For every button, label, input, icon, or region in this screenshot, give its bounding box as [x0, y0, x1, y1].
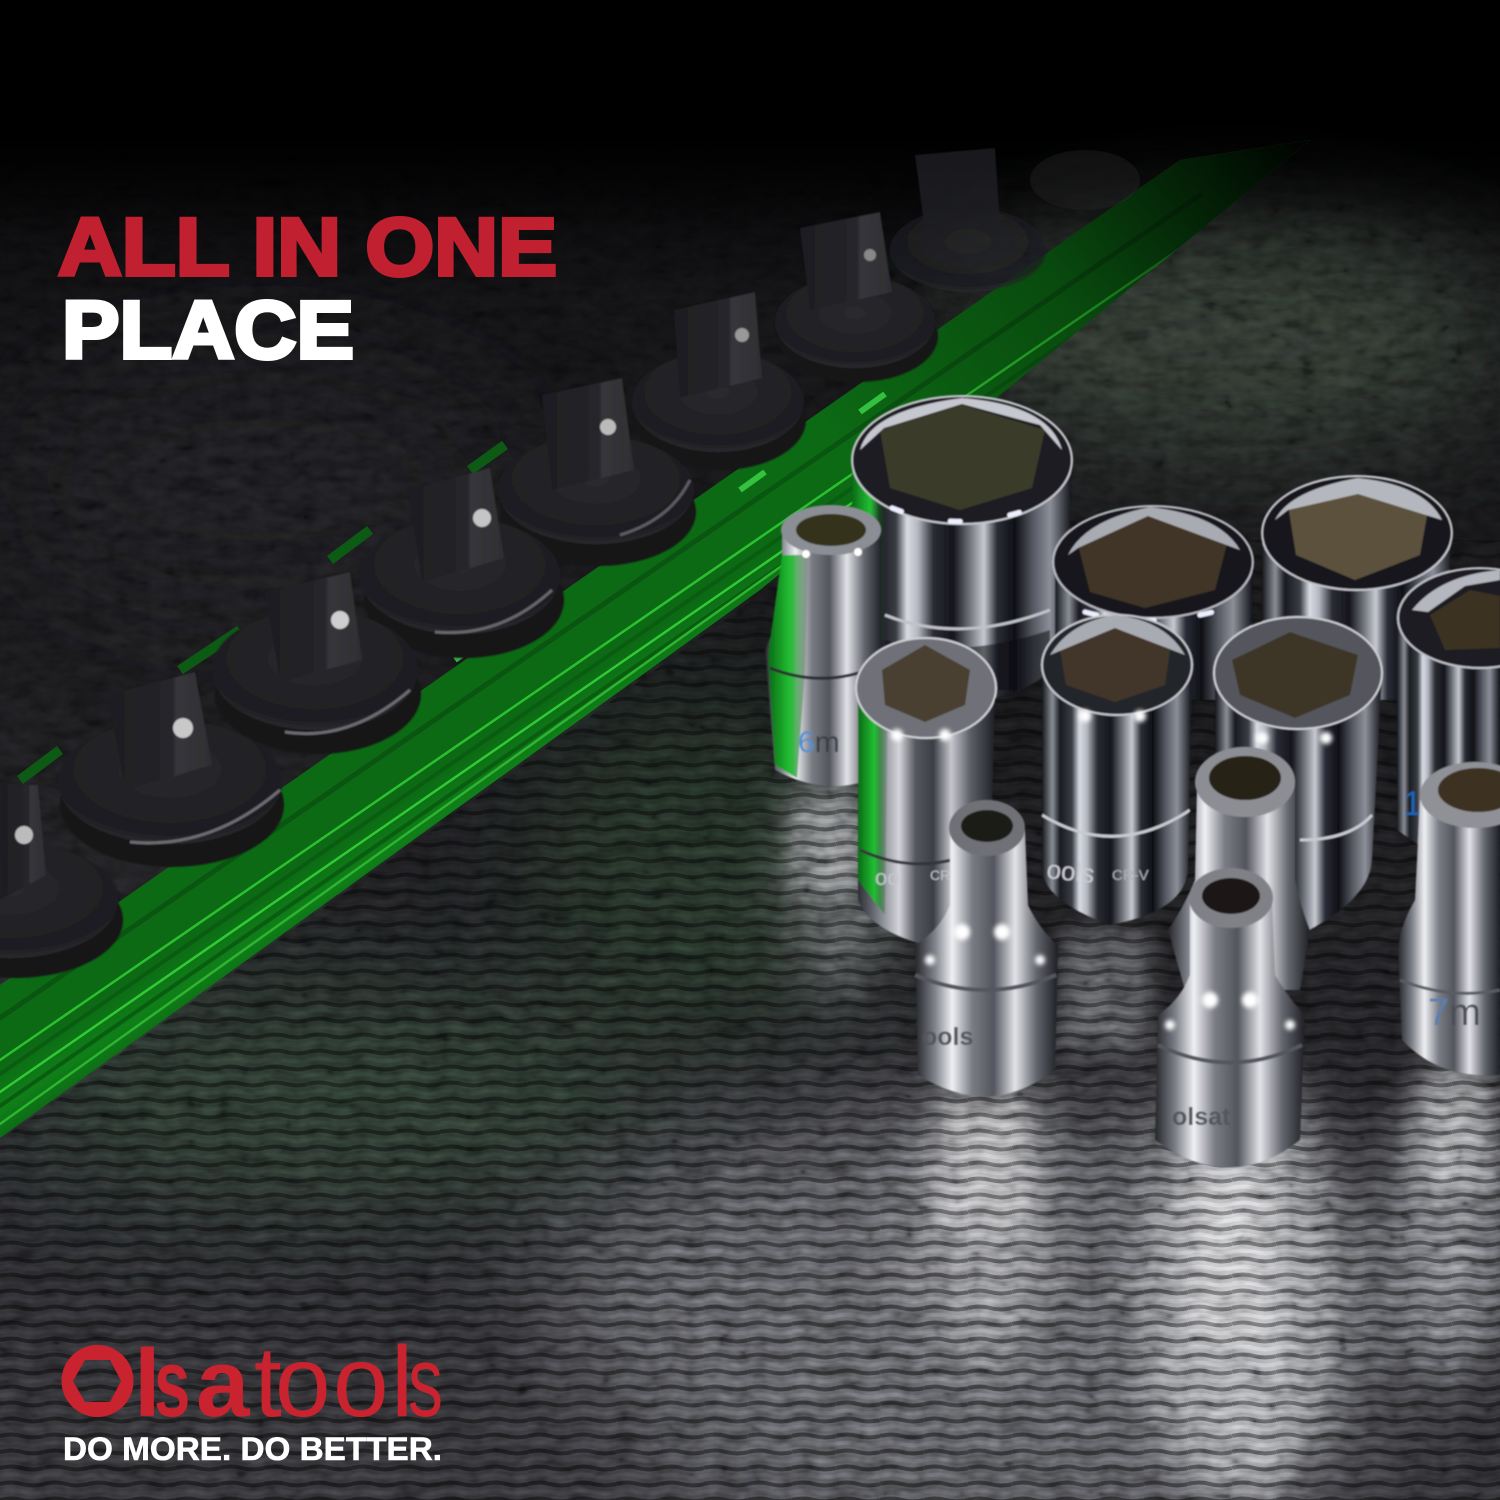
- socket: front small left: [915, 800, 1058, 1096]
- socket: front right tall: [1214, 617, 1382, 935]
- logo: Olsatools: [62, 1326, 443, 1438]
- socket: large rear: [852, 396, 1072, 705]
- adapter 7: [775, 212, 938, 382]
- logo wordmark bold: l: [134, 1330, 161, 1437]
- socket: right edge upper: [1397, 568, 1500, 860]
- group of chrome sockets: [765, 396, 1500, 1168]
- socket: front centre tall: CR-V: [1112, 867, 1149, 884]
- adapter 1 (cut by left edge): [0, 785, 123, 978]
- adapter 5: [498, 378, 696, 566]
- logo icon: hexagon O: [62, 1345, 134, 1417]
- row of black socket adapters on the rail: [0, 148, 1140, 978]
- socket brand marking: ools: [1045, 854, 1096, 889]
- socket: front small right: olsat: [1172, 1103, 1231, 1131]
- adapter 6: [632, 292, 806, 470]
- title line 1: ALL IN ONE: [58, 202, 557, 293]
- socket size marking: 6m: [798, 726, 840, 759]
- socket: right edge lower 7mm: 7m: [1428, 992, 1481, 1034]
- title: ALL IN ONE PLACE: [58, 202, 557, 376]
- socket: front small left: ools: [922, 1023, 973, 1051]
- adapter 8 (faded): [890, 148, 1046, 292]
- socket: rear middle: [1053, 506, 1253, 700]
- socket: small 6mm: [765, 505, 882, 786]
- adapter 3: [212, 572, 421, 754]
- logo: Olsatools: s: [408, 1327, 443, 1438]
- logo wordmark light: tool: [254, 1326, 413, 1438]
- adapter 4: [360, 468, 564, 658]
- socket: front small right: [1155, 868, 1305, 1168]
- reflections under sockets: [790, 790, 1490, 1345]
- socket: small middle: [1168, 747, 1310, 990]
- socket: rear right: [1262, 476, 1452, 700]
- socket: front left tall: CR: [930, 867, 950, 883]
- glints on the rail's upper edge: [20, 445, 505, 780]
- tagline: DO MORE. DO BETTER.: [63, 1431, 442, 1467]
- socket: front left tall: [856, 638, 996, 945]
- socket: front centre tall: [1042, 615, 1192, 925]
- socket: front left tall: oo: [875, 865, 899, 890]
- title line 2: PLACE: [62, 285, 354, 376]
- adapter 9 (faded, far end): [1030, 150, 1140, 210]
- socket: right edge lower 7mm: [1398, 762, 1500, 1076]
- logo: Olsatools: s: [154, 1331, 190, 1437]
- green socket rail: [0, 140, 1310, 1138]
- adapter 2: [58, 672, 284, 867]
- socket: right edge upper: 1: [1403, 785, 1422, 823]
- logo: Olsatools: a: [196, 1330, 250, 1437]
